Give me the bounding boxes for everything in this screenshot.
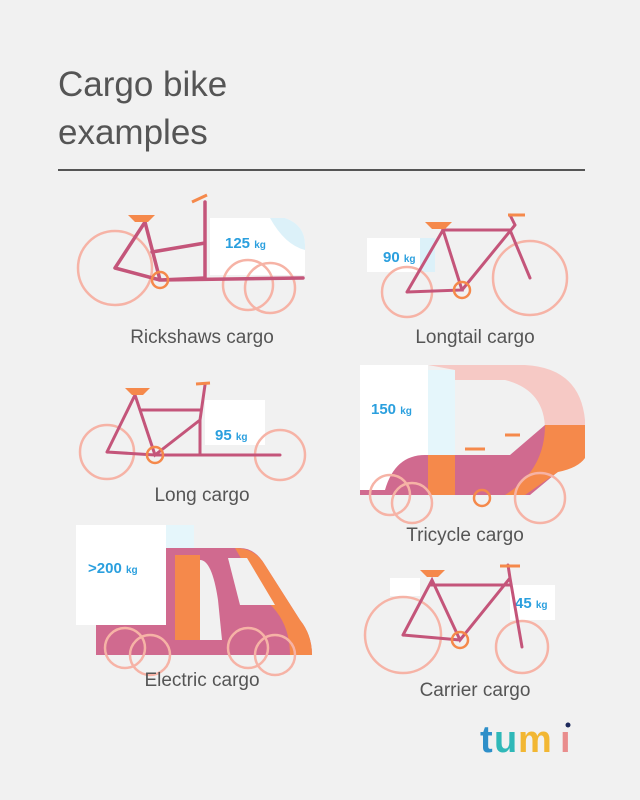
bike: tricycle cargo (360, 365, 585, 523)
label: electric cargo: Electric cargo (144, 670, 260, 691)
label: tricycle cargo: Tricycle cargo (406, 525, 524, 546)
bike: longtail cargo (367, 215, 567, 317)
label: long cargo: Long cargo (154, 485, 250, 506)
label: 125 kg: 125 kg (225, 235, 266, 252)
label: carrier cargo: Carrier cargo (420, 680, 530, 701)
label: 150 kg: 150 kg (371, 401, 412, 418)
bike: carrier cargo (365, 565, 555, 673)
logo: tumi: u (494, 719, 517, 761)
title (58, 65, 227, 152)
label: 90 kg: 90 kg (383, 249, 416, 266)
bike: long cargo (80, 383, 305, 480)
logo: tumi: t (480, 719, 493, 761)
logo: tumi (480, 719, 571, 761)
label: 45 kg: 45 kg (515, 595, 548, 612)
label: >200 kg: >200 kg (88, 560, 138, 577)
logo: tumi: m (518, 719, 552, 761)
logo: tumi: ı (560, 719, 571, 761)
title: Cargo bike (58, 65, 227, 104)
bike: rickshaws cargo (78, 195, 305, 313)
label: rickshaws cargo: Rickshaws cargo (130, 327, 274, 348)
label: 95 kg: 95 kg (215, 427, 248, 444)
label: longtail cargo: Longtail cargo (415, 327, 535, 348)
vehicle: electric cargo (76, 525, 312, 675)
title: examples (58, 113, 208, 152)
